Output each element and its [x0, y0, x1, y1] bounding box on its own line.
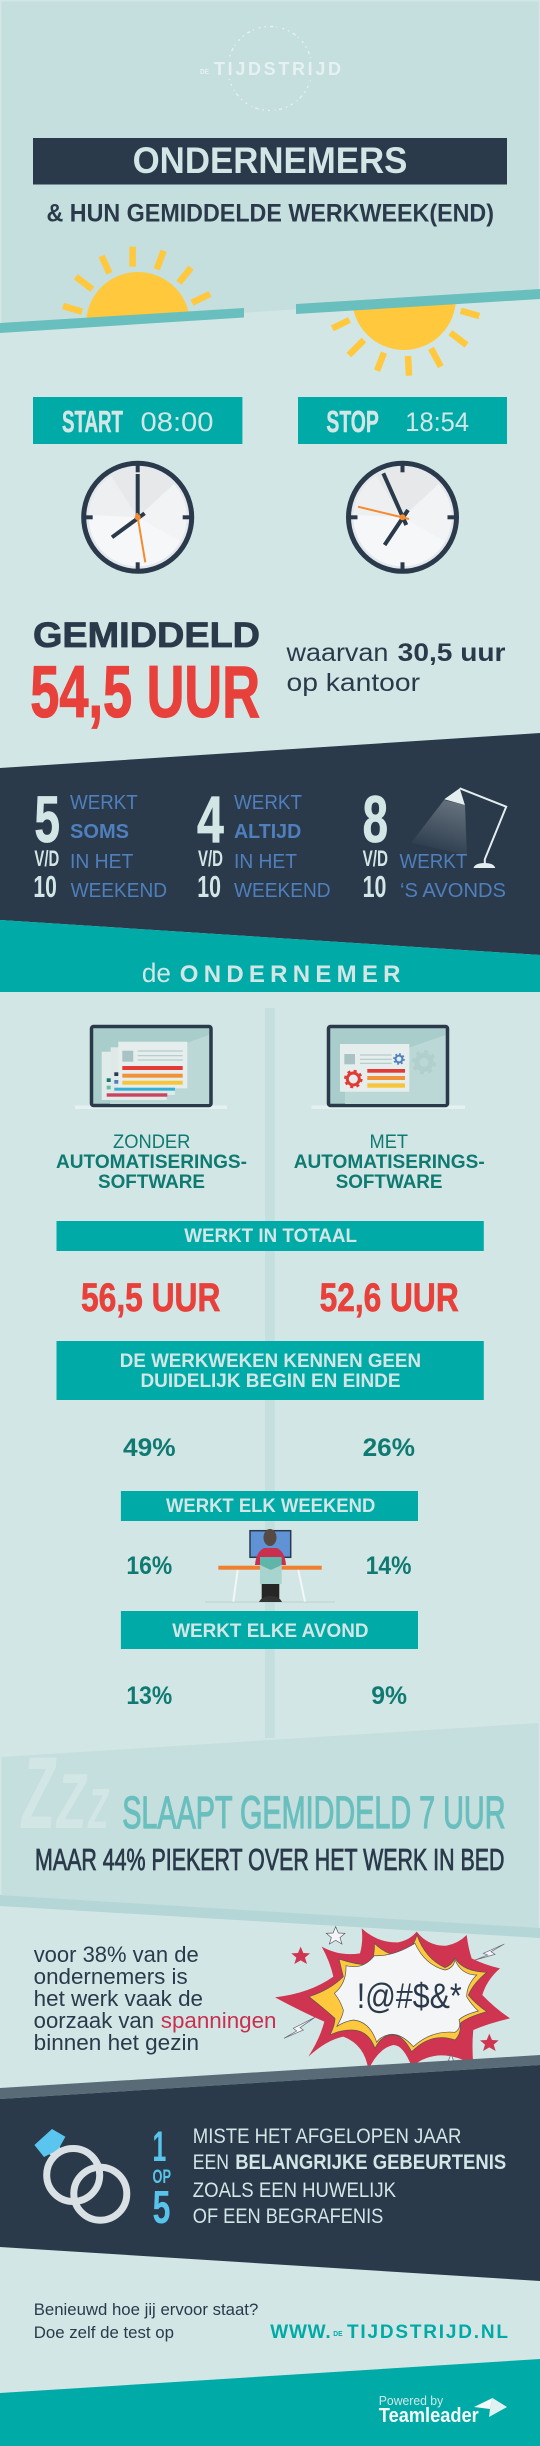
logo: powered by Teamleader: Teamleader	[379, 2405, 479, 2427]
stat: 9%: 9%	[371, 1682, 407, 1710]
text: miste een belangrijke gebeurtenis: EEN	[193, 2151, 229, 2174]
heading: met automatiseringssoftware: MET	[370, 1131, 408, 1153]
stat: 5 van de 10: WEEKEND	[71, 880, 167, 902]
text: waarvan 30,5 uur op kantoor: 30,5 uur	[398, 639, 506, 667]
start label	[33, 397, 242, 444]
text: miste een belangrijke gebeurtenis: BELANGRIJKE GEBEURTENIS	[235, 2151, 506, 2174]
bar: werkt elke avond: WERKT ELKE AVOND	[172, 1621, 368, 1642]
logo: powered by Teamleader: Powered by	[379, 2393, 444, 2408]
start label: START	[62, 404, 123, 439]
stat: 5 van de 10: 10	[33, 869, 57, 904]
text: waarvan 30,5 uur op kantoor: waarvan	[285, 639, 388, 667]
stat: 4 van de 10: 4	[197, 782, 224, 856]
icon: zzz	[20, 1736, 110, 1850]
stat: 13%: 13%	[126, 1682, 172, 1710]
icon: comic burst: !@#$&*	[357, 1977, 462, 2016]
stat: 4 van de 10: WEEKEND	[234, 880, 331, 902]
logo: de Tijdstrijd: DE	[200, 69, 209, 76]
text: waarvan 30,5 uur op kantoor	[285, 639, 506, 697]
panel: sleep band	[0, 1723, 540, 1938]
text: spanningen binnen het gezin: het werk vaak de	[34, 1986, 203, 2011]
text: miste een belangrijke gebeurtenis: ZOALS EEN HUWELIJK	[193, 2179, 396, 2202]
link: website url: DE	[333, 2331, 343, 2338]
stat: 5 van de 10: 5	[34, 782, 60, 856]
stat: 5 van de 10	[33, 782, 167, 904]
icon: zzz: Z	[55, 1757, 88, 1845]
text: spanningen binnen het gezin: binnen het gezin	[34, 2030, 199, 2055]
text: miste een belangrijke gebeurtenis: OF EEN BEGRAFENIS	[193, 2205, 383, 2228]
text: spanningen binnen het gezin: spanningen	[161, 2008, 276, 2033]
stat: 8 van de 10: WERKT	[400, 851, 467, 873]
stat: gemiddeld 54,5 uur: GEMIDDELD	[33, 615, 260, 655]
text: benieuwd call to action: Benieuwd hoe jij ervoor staat?	[34, 2300, 258, 2319]
stat: gemiddeld 54,5 uur	[30, 615, 260, 733]
logo: de Tijdstrijd	[195, 26, 345, 110]
stat: 49%: 49%	[123, 1434, 176, 1462]
stat: 1 op 5: OP	[152, 2167, 171, 2188]
icon: zzz: Z	[87, 1777, 110, 1841]
panel: teal section header	[0, 920, 540, 992]
bar: geen duidelijk begin en einde	[56, 1341, 484, 1400]
stat: 56,5 uur: 56,5 UUR	[81, 1276, 220, 1320]
text: spanningen binnen het gezin: voor 38% van de	[34, 1942, 199, 1967]
stat: 5 van de 10: SOMS	[70, 821, 129, 843]
stat: 8 van de 10: V/D	[363, 846, 388, 871]
panel: teal section header: ONDERNEMER	[180, 961, 400, 988]
icon: zzz: Z	[20, 1736, 57, 1850]
stat: 1 op 5: 5	[152, 2181, 170, 2233]
stat: 26%: 26%	[363, 1434, 415, 1462]
stat: 8 van de 10	[363, 782, 506, 904]
link: website url: WWW.	[270, 2322, 331, 2343]
icon: clock 08:00	[78, 457, 198, 571]
stat: gemiddeld 54,5 uur: 54,5 UUR	[30, 652, 260, 733]
link: website url	[270, 2322, 508, 2343]
stat: 1 op 5	[152, 2123, 171, 2233]
stop label: 18:54	[405, 407, 469, 437]
panel: teal footer	[0, 2359, 540, 2446]
start label: 08:00	[140, 407, 214, 437]
bar: werkt elk weekend: WERKT ELK WEEKEND	[166, 1496, 375, 1517]
panel: teal section header: de	[142, 958, 171, 988]
title banner: ONDERNEMERS	[133, 139, 407, 181]
bar: werkt elk weekend	[121, 1491, 418, 1521]
panel: dark band weekly habits	[0, 733, 540, 955]
background: top band	[2, 2, 538, 328]
text: spanningen binnen het gezin: oorzaak van	[34, 2008, 154, 2033]
stat: 5 van de 10: WERKT	[70, 792, 138, 814]
text: miste een belangrijke gebeurtenis: MISTE HET AFGELOPEN JAAR	[193, 2125, 461, 2148]
text: miste een belangrijke gebeurtenis	[193, 2125, 506, 2228]
stat: 8 van de 10: 8	[363, 782, 388, 856]
text: waarvan 30,5 uur op kantoor: op kantoor	[286, 669, 420, 697]
icon: clock 18:54	[342, 457, 462, 571]
stat: 5 van de 10: IN HET	[70, 851, 133, 873]
logo: de Tijdstrijd: TIJDSTRIJD	[214, 59, 341, 79]
stat: 4 van de 10: V/D	[198, 846, 223, 871]
icon: setting sun	[296, 289, 540, 376]
bar: geen duidelijk begin en einde: DUIDELIJK BEGIN EN EINDE	[140, 1371, 400, 1392]
stop label	[298, 397, 507, 444]
bar: geen duidelijk begin en einde: DE WERKWEKEN KENNEN GEEN	[120, 1351, 421, 1372]
heading: zonder automatiseringssoftware: ZONDER	[113, 1131, 190, 1153]
heading: met automatiseringssoftware	[294, 1131, 485, 1193]
heading: met automatiseringssoftware: AUTOMATISERINGS-	[294, 1151, 485, 1173]
stat: 4 van de 10: IN HET	[234, 851, 297, 873]
stat: 8 van de 10: ‘S AVONDS	[400, 880, 506, 902]
heading: zonder automatiseringssoftware: AUTOMATISERINGS-	[56, 1151, 247, 1173]
stat: 16%: 16%	[126, 1552, 172, 1580]
icon: rising sun	[0, 246, 244, 333]
icon: laptop with software	[312, 1026, 465, 1109]
text: benieuwd call to action: Doe zelf de test op	[34, 2323, 174, 2342]
stat: 5 van de 10: V/D	[34, 846, 59, 871]
text: benieuwd call to action	[34, 2300, 258, 2342]
stat: 4 van de 10: WERKT	[234, 792, 302, 814]
bar: werkt elke avond	[121, 1611, 418, 1649]
subtitle: & HUN GEMIDDELDE WERKWEEK(END)	[46, 200, 494, 228]
icon: laptop without software	[75, 1026, 227, 1109]
heading: met automatiseringssoftware: SOFTWARE	[336, 1171, 442, 1193]
bar: werkt in totaal: WERKT IN TOTAAL	[184, 1226, 357, 1247]
stat: 14%: 14%	[366, 1552, 412, 1580]
icon: desk lamp	[411, 788, 506, 868]
link: website url: TIJDSTRIJD.NL	[347, 2322, 508, 2343]
divider column	[265, 1008, 275, 1738]
text: spanningen binnen het gezin: ondernemers is	[34, 1964, 188, 1989]
icon: person at desk	[205, 1529, 335, 1602]
stat: 4 van de 10: ALTIJD	[234, 821, 301, 843]
bar: werkt in totaal	[56, 1221, 484, 1251]
icon: comic burst	[275, 1927, 510, 2070]
icon: wedding rings	[34, 2129, 127, 2220]
heading: zonder automatiseringssoftware	[56, 1131, 247, 1193]
stat: 4 van de 10: 10	[197, 869, 221, 904]
title banner	[33, 138, 507, 184]
stat: 8 van de 10: 10	[363, 869, 386, 904]
stop label: STOP	[326, 404, 379, 439]
text: spanningen binnen het gezin	[34, 1942, 277, 2055]
stat: 1 op 5: 1	[152, 2123, 166, 2171]
panel: dark band missed events	[0, 2055, 540, 2281]
heading: zonder automatiseringssoftware: SOFTWARE	[98, 1171, 205, 1193]
stat: 52,6 uur: 52,6 UUR	[320, 1276, 459, 1320]
logo: powered by Teamleader	[379, 2393, 507, 2427]
stat: 4 van de 10	[197, 782, 331, 904]
